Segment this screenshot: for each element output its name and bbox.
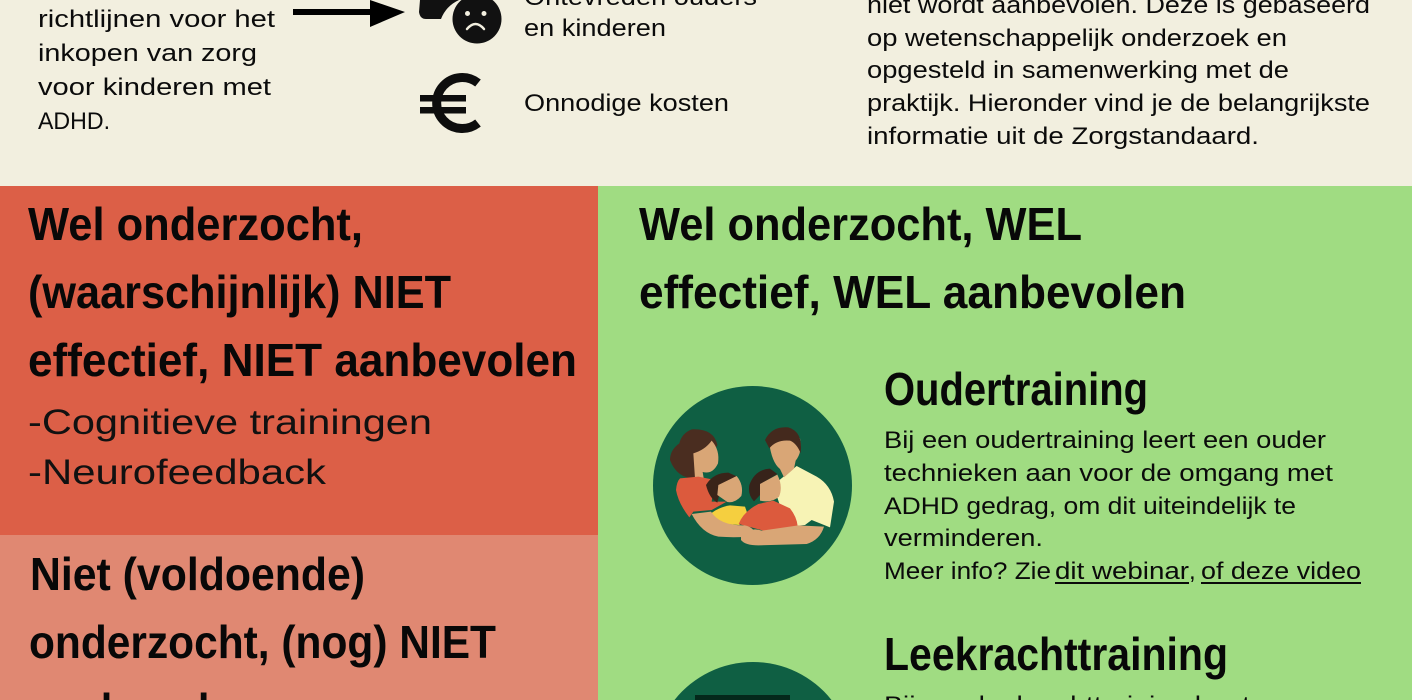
text: about the care standard: praktijk. Hieronder vind je de belangrijkste — [867, 90, 1370, 117]
heading: researched, not recommended: (waarschijnlijk) NIET — [28, 266, 451, 318]
text: parent training description: of deze video — [1201, 558, 1361, 585]
text: purchasing guidelines: ADHD. — [38, 108, 110, 135]
heading: effective and recommended: effectief, WEL aanbevolen — [639, 266, 1186, 318]
icon: unhappy parents and children — [419, 0, 502, 44]
heading: parent training: Oudertraining — [884, 363, 1148, 415]
text: purchasing guidelines: inkopen van zorg — [38, 40, 257, 67]
list: not recommended treatments: -Neurofeedback — [28, 453, 327, 492]
icon: euro — [420, 78, 478, 129]
text: about the care standard — [867, 0, 1370, 150]
text: purchasing guidelines — [38, 6, 275, 135]
text: parent training description — [884, 427, 1361, 585]
text: parent training description: ADHD gedrag, om dit uiteindelijk te — [884, 493, 1296, 520]
panel: introduction — [0, 0, 1412, 186]
list: not recommended treatments: -Cognitieve trainingen — [28, 403, 432, 442]
text: unhappy parents and children — [524, 0, 757, 42]
text: parent training description: dit webinar — [1055, 558, 1189, 585]
text: purchasing guidelines: voor kinderen met — [38, 74, 271, 101]
icon: lay training — [674, 662, 832, 700]
heading: not sufficiently researched: onderzocht, (nog) NIET — [29, 616, 496, 668]
heading: researched, not recommended: effectief, NIET aanbevolen — [28, 334, 577, 386]
text: parent training description: Meer info? Zie — [884, 558, 1051, 585]
text: about the care standard: opgesteld in samenwerking met de — [867, 57, 1289, 84]
heading: effective and recommended — [639, 198, 1186, 318]
text: about the care standard: informatie uit de Zorgstandaard. — [867, 123, 1259, 150]
panel: researched, effective, recommended — [598, 186, 1412, 700]
heading: effective and recommended: Wel onderzocht, WEL — [639, 198, 1082, 250]
panel: researched, not effective — [0, 186, 598, 535]
heading: not sufficiently researched — [29, 548, 496, 700]
heading: researched, not recommended — [28, 198, 577, 386]
heading: lay training: Leekrachttraining — [884, 628, 1228, 680]
arrow — [293, 0, 405, 27]
text: parent training description: , — [1189, 558, 1196, 585]
heading: not sufficiently researched: Niet (voldoende) — [30, 548, 365, 600]
icon: family illustration — [653, 386, 852, 585]
text: parent training description: Bij een oudertraining leert een ouder — [884, 427, 1326, 454]
text: purchasing guidelines: richtlijnen voor het — [38, 6, 275, 33]
panel: not sufficiently researched — [0, 535, 598, 700]
text: unhappy parents and children: en kinderen — [524, 15, 666, 42]
list: not recommended treatments — [28, 403, 432, 492]
heading: researched, not recommended: Wel onderzocht, — [28, 198, 363, 250]
text: parent training description: verminderen. — [884, 525, 1043, 552]
text: about the care standard: op wetenschappelijk onderzoek en — [867, 25, 1287, 52]
text: unnecessary costs: Onnodige kosten — [524, 90, 729, 117]
text: parent training description: technieken aan voor de omgang met — [884, 460, 1333, 487]
